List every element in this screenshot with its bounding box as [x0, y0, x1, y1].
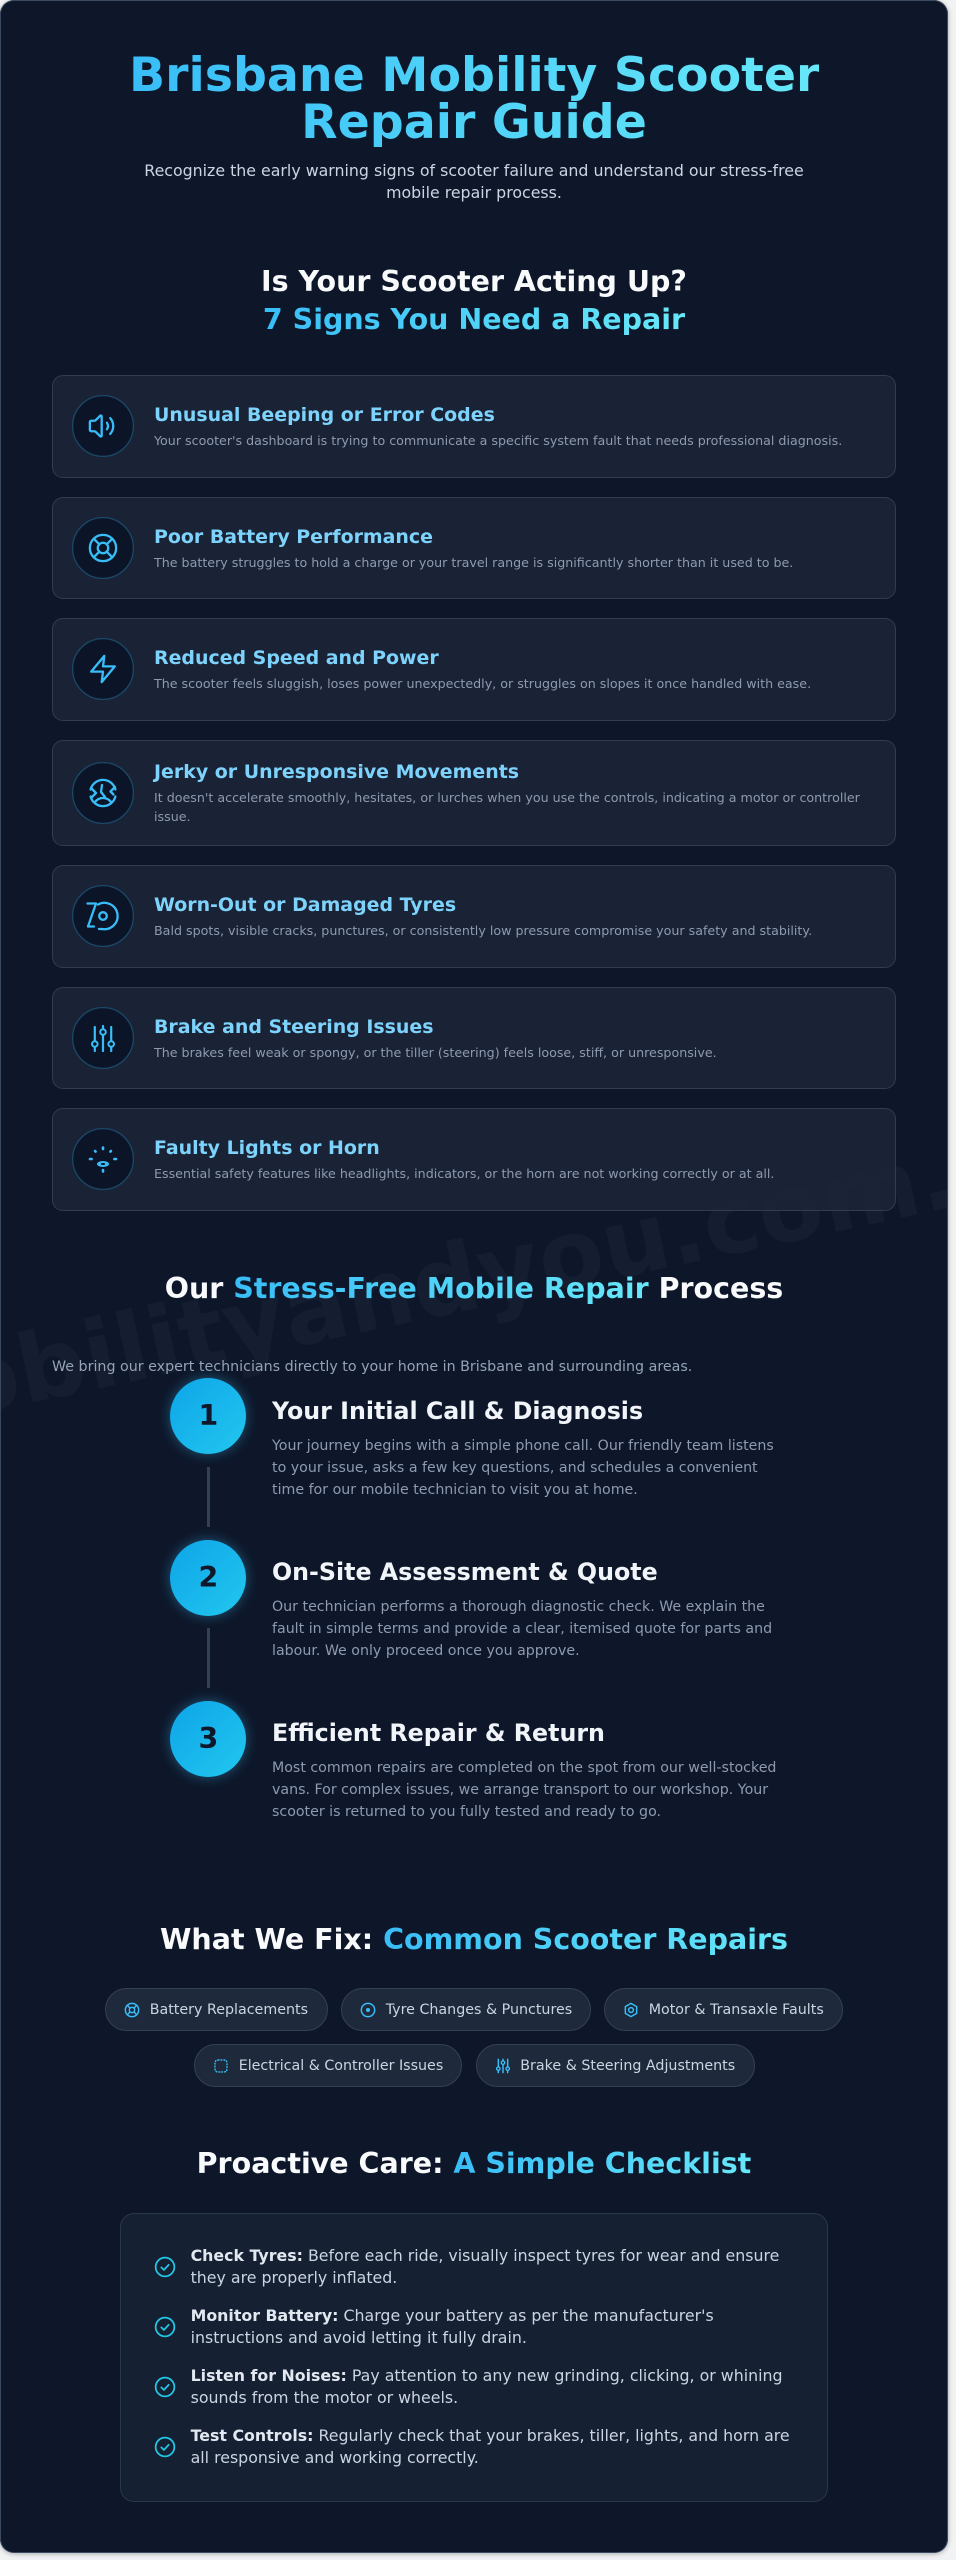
heading: what we fix: What We Fix: Common Scooter Repairs [160, 1923, 788, 1956]
check icon 1 [154, 2256, 176, 2278]
heading: proactive care: Proactive Care: A Simple Checklist [197, 2147, 751, 2180]
item 4 text [190, 2426, 790, 2467]
card title: Faulty Lights or Horn [154, 1137, 380, 1159]
card: beeping [52, 375, 896, 478]
icon: tyre small [360, 2002, 376, 2018]
icon: speaker [72, 395, 134, 457]
step 2 text: labour. We only proceed once you approve. [272, 1643, 580, 1659]
icon: sliders small [496, 2058, 510, 2074]
check icon 3 [154, 2376, 176, 2398]
item 1 text: Check Tyres: Before each ride, visually inspect tyres for wear and ensure [191, 2246, 779, 2265]
card: tyres [52, 865, 896, 968]
item 3 text [191, 2366, 783, 2407]
item 4 text: Test Controls: Regularly check that your brakes, tiller, lights, and horn are [191, 2426, 790, 2445]
card text [154, 790, 860, 824]
pill label: Motor & Transaxle Faults [649, 2002, 824, 2018]
card text: The scooter feels sluggish, loses power unexpectedly, or struggles on slopes it once handled with ease. [154, 676, 811, 691]
card: brakes [52, 987, 896, 1089]
step 3 text: scooter is returned to you fully tested and ready to go. [272, 1804, 661, 1820]
item 2 text: Monitor Battery: Charge your battery as per the manufacturer's [191, 2306, 714, 2325]
card title: Worn-Out or Damaged Tyres [154, 894, 456, 916]
step 3 number: 3 [198, 1722, 218, 1755]
subtitle: Recognize the early warning signs of scooter failure and understand our stress-free [144, 161, 804, 180]
pill label: Battery Replacements [150, 2002, 308, 2018]
icon: life buoy small [124, 2002, 140, 2018]
panel: checklist [120, 2213, 828, 2502]
pill label: Tyre Changes & Punctures [386, 2002, 572, 2018]
icon: lightning bolt [72, 638, 134, 700]
card text: The battery struggles to hold a charge or your travel range is significantly shorter than it used to be. [154, 555, 793, 570]
connector 2 [207, 1628, 210, 1688]
step 3 text: vans. For complex issues, we arrange transport to our workshop. Your [272, 1782, 768, 1798]
step 3 text [272, 1760, 776, 1820]
panel: process steps [163, 1371, 776, 1820]
panel: repair pills [105, 1988, 843, 2087]
pill: tyre [341, 1988, 590, 2031]
card title: Jerky or Unresponsive Movements [154, 761, 519, 783]
pill label: Brake & Steering Adjustments [520, 2058, 735, 2074]
icon: lights [72, 1128, 134, 1190]
pill: motor [604, 1988, 843, 2031]
icon: gear [624, 2002, 638, 2018]
icon: broken gauge [72, 762, 134, 824]
pill label: Electrical & Controller Issues [239, 2058, 443, 2074]
step 1 text: time for our mobile technician to visit you at home. [272, 1482, 638, 1498]
step 2 text: Our technician performs a thorough diagnostic check. We explain the [272, 1599, 765, 1615]
item 2 text [191, 2306, 714, 2347]
card: jerky [52, 740, 896, 846]
card: lights [52, 1108, 896, 1211]
card: speed [52, 618, 896, 721]
pill: brakes [476, 2044, 755, 2086]
check icon 2 [154, 2316, 176, 2338]
heading: seven signs: 7 Signs You Need a Repair [263, 303, 685, 336]
icon: life buoy [72, 517, 134, 579]
card title: Brake and Steering Issues [154, 1016, 434, 1038]
step 2 number: 2 [198, 1561, 218, 1594]
card title: Unusual Beeping or Error Codes [154, 404, 495, 426]
step 3 number [170, 1701, 246, 1777]
step 1 text: Your journey begins with a simple phone call. Our friendly team listens [272, 1438, 774, 1454]
step 2 number [170, 1540, 246, 1616]
icon: sliders [72, 1007, 134, 1069]
step 1 number: 1 [198, 1399, 218, 1432]
card: battery [52, 497, 896, 599]
icon: dotted chip [214, 2059, 228, 2073]
step 1 title: Your Initial Call & Diagnosis [272, 1397, 643, 1425]
check icon 4 [154, 2436, 176, 2458]
step 3 text: Most common repairs are completed on the spot from our well-stocked [272, 1760, 776, 1776]
step 2 title: On-Site Assessment & Quote [272, 1558, 658, 1586]
step 2 text: fault in simple terms and provide a clear, itemised quote for parts and [272, 1621, 772, 1637]
heading: seven signs: Is Your Scooter Acting Up? [261, 265, 687, 298]
step 3 title: Efficient Repair & Return [272, 1719, 605, 1747]
card title: Reduced Speed and Power [154, 647, 439, 669]
step 1 number [170, 1378, 246, 1454]
item 1 text [191, 2246, 779, 2287]
title: Brisbane Mobility Scooter [129, 48, 819, 103]
card title: Poor Battery Performance [154, 526, 433, 548]
item 1 text: they are properly inflated. [191, 2268, 397, 2287]
item 4 text: all responsive and working correctly. [191, 2448, 479, 2467]
step 2 text [272, 1599, 772, 1659]
pill: battery [105, 1988, 328, 2031]
connector 1 [207, 1467, 210, 1527]
card text: issue. [154, 809, 191, 824]
step 1 text [272, 1438, 774, 1498]
title: Repair Guide [301, 95, 647, 150]
panel: seven warning signs [52, 375, 896, 1211]
subtitle [144, 161, 804, 202]
subtitle: mobile repair process. [386, 183, 562, 202]
process intro text: We bring our expert technicians directly to your home in Brisbane and surrounding areas. [52, 1359, 692, 1375]
card text: Bald spots, visible cracks, punctures, or consistently low pressure compromise your safety and stability. [154, 923, 812, 938]
pill: electrical [194, 2044, 462, 2086]
item 2 text: instructions and avoid letting it fully drain. [191, 2328, 527, 2347]
card text: The brakes feel weak or spongy, or the tiller (steering) feels loose, stiff, or unresponsive. [154, 1045, 717, 1060]
item 3 text: Listen for Noises: Pay attention to any new grinding, clicking, or whining [191, 2366, 783, 2385]
card text: Your scooter's dashboard is trying to communicate a specific system fault that needs professional diagnosis. [154, 433, 842, 448]
heading: process: Our Stress-Free Mobile Repair Process [165, 1272, 783, 1305]
heading: seven signs [261, 265, 687, 336]
item 3 text: sounds from the motor or wheels. [191, 2388, 458, 2407]
card text: It doesn't accelerate smoothly, hesitates, or lurches when you use the controls, indicating a motor or controller [154, 790, 860, 805]
step 1 text: to your issue, asks a few key questions, and schedules a convenient [272, 1460, 758, 1476]
title [129, 52, 819, 147]
card text: Essential safety features like headlights, indicators, or the horn are not working correctly or at all. [154, 1166, 774, 1181]
icon: tyre [72, 885, 134, 947]
